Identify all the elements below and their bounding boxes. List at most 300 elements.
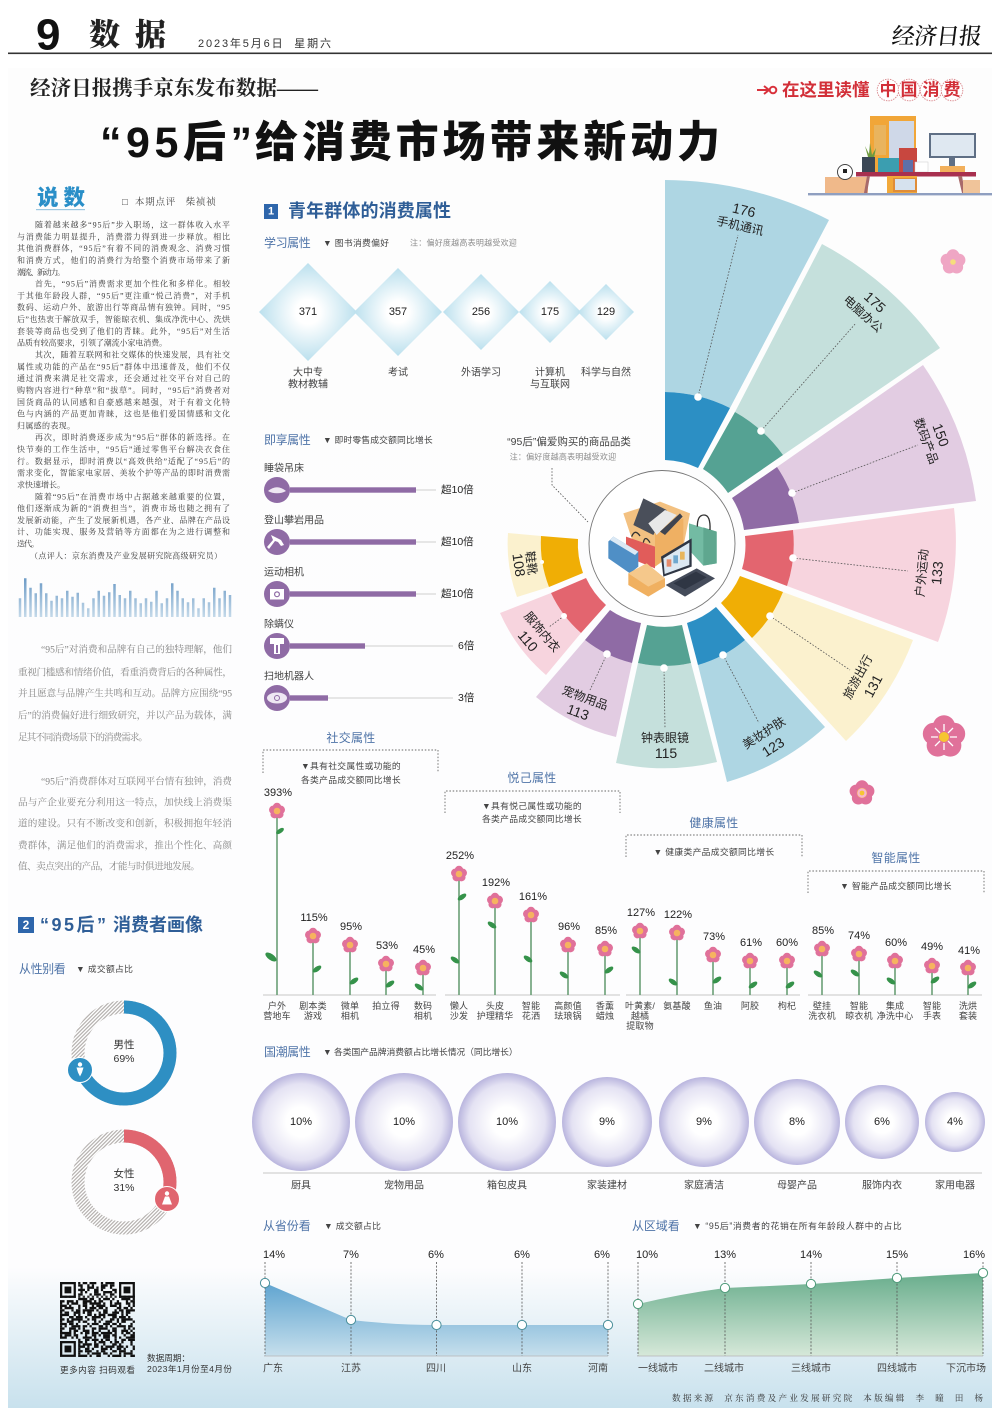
section name: 数据 bbox=[89, 18, 181, 52]
flower: 枸杞: 枸杞 bbox=[778, 1000, 796, 1011]
newspaper logo: 经济日报 bbox=[890, 23, 984, 49]
flower: 叶黄素: 127% bbox=[627, 907, 655, 919]
row: sleeping bag bbox=[264, 462, 474, 503]
flower: 阿胶 bbox=[740, 937, 762, 1011]
bubble chart: guochao: 9% bbox=[599, 1116, 615, 1128]
flower chart: health bbox=[625, 815, 802, 1031]
radial chart heading: 注：偏好度越高表明越受欢迎 bbox=[510, 452, 616, 462]
QR code bbox=[60, 1283, 135, 1356]
flower: 洗烘套装: 套装 bbox=[959, 1010, 977, 1021]
diamond chart: book preference bbox=[259, 263, 634, 390]
flower: 香薰蜡烛: 85% bbox=[595, 925, 617, 937]
commentary text: 快节奏的工作生活中，“95后”通过零售平台解决衣食住 bbox=[17, 444, 230, 455]
analysis text: 品与产企业要充分利用这一特点，加快线上消费渠 bbox=[18, 796, 232, 808]
flower: 智能手表: 49% bbox=[921, 941, 943, 953]
heading: section 2: “95后” bbox=[40, 915, 106, 935]
chart heading: province: ▼ 成交额占比 bbox=[324, 1220, 381, 1231]
data period note: 2023年1月份至4月份 bbox=[147, 1363, 232, 1374]
icon: arrow bbox=[757, 86, 776, 94]
flower chart: smart bbox=[808, 850, 984, 1021]
analysis text bbox=[18, 644, 232, 872]
bubble chart: guochao: 4% bbox=[947, 1116, 963, 1128]
flower: 叶黄素: 叶黄素/ bbox=[625, 1000, 655, 1011]
commentary text: 首先，“95后”消费需求更加个性化和多样化。相较 bbox=[35, 279, 231, 290]
flower: 壁挂洗衣机: 壁挂 bbox=[813, 1000, 831, 1011]
flower: 氨基酸 bbox=[663, 909, 692, 1011]
area chart: region: 10% bbox=[636, 1249, 658, 1261]
commentary text: 色与内涵的产品更加青睐，这也是他们爱国情感和文化 bbox=[17, 409, 230, 420]
chart heading: guochao: ▼ 各类国产品牌消费额占比增长情况（同比增长） bbox=[323, 1046, 518, 1057]
commentary text: 计、功能实现、服务及营销等方面都在为之进行调整和 bbox=[17, 527, 230, 537]
chart heading: province: 从省份看 bbox=[263, 1219, 311, 1233]
analysis text: 后”的消费偏好进行细致研究，并以产品为载体，满 bbox=[18, 710, 232, 722]
commentary text: 于其他年龄段人群，“95后”更注重“悦己消费”，对手机 bbox=[17, 290, 230, 301]
flower: 数码相机: 相机 bbox=[414, 1010, 432, 1021]
sector: digital: 数码产品 bbox=[911, 416, 942, 466]
flower: 枸杞: 60% bbox=[776, 937, 798, 949]
bubble chart: guochao: 6% bbox=[874, 1116, 890, 1128]
flower: 剧本类游戏: 游戏 bbox=[304, 1010, 322, 1021]
commentary text: 他们逐渐成为新的“消费担当”，消费市场也随之拥有了 bbox=[17, 503, 230, 514]
flower: 壁挂洗衣机: 洗衣机 bbox=[808, 1010, 836, 1021]
diamond chart: book preference: 357 bbox=[389, 306, 407, 318]
analysis text: 费群体，满足他们的消费需求，推出个性化、高颜 bbox=[18, 840, 232, 852]
commentary text: 行。数据显示，即时消费以“高效供给”适配了“95后”的 bbox=[17, 456, 230, 467]
chart heading: instant retail: ▼ 即时零售成交额同比增长 bbox=[323, 434, 433, 445]
heading: section 2: 消费者画像 bbox=[113, 915, 203, 935]
flower: 智能晾衣机: 晾衣机 bbox=[845, 1010, 873, 1021]
flower: 数码相机: 45% bbox=[413, 944, 435, 956]
sector: travel: 131 bbox=[860, 672, 886, 700]
heading: gender bbox=[19, 962, 133, 976]
area chart: province: 6% bbox=[514, 1249, 530, 1261]
data period note: 数据周期： bbox=[147, 1352, 190, 1363]
diamond chart: book preference: 371 bbox=[299, 306, 317, 318]
flower: 微单相机: 相机 bbox=[341, 1010, 359, 1021]
flower: 拍立得 bbox=[372, 940, 400, 1011]
commentary text: 需求变化，智能家电家居、美妆个护等产品的即时消费需 bbox=[17, 468, 230, 479]
chart heading: region bbox=[632, 1219, 902, 1233]
commentary text: 数码、运动户外、旅游出行等商品情有独钟。同时，“95 bbox=[17, 302, 230, 313]
series tag: 中 bbox=[880, 80, 896, 100]
series tag: 费 bbox=[944, 80, 960, 100]
diamond chart: book preference: 教材教辅 bbox=[288, 378, 328, 390]
flower: 集成净洗中心: 60% bbox=[885, 937, 907, 949]
subtitle: ▼ 健康类产品成交额同比增长 bbox=[654, 846, 774, 857]
chart heading: learning bbox=[264, 235, 517, 250]
commentary text: 国货商品的认同感和自豪感越来越强，对于有着文化特 bbox=[17, 397, 230, 408]
commentary text: 品质有较高要求，引领了潮流小家电消费。 bbox=[17, 338, 167, 349]
diamond chart: book preference: 129 bbox=[597, 306, 615, 318]
commentary text: 套装等商品也受到了他们的青睐。此外，“95后”对生活 bbox=[17, 326, 230, 337]
heading: 智能属性 bbox=[871, 850, 921, 865]
analysis text: 道的建设。只有不断改变和创新，积极拥抱年轻消 bbox=[18, 818, 232, 830]
commentary text: 再次，即时消费逐步成为“95后”群体的新选择。在 bbox=[35, 432, 230, 443]
heading: section 2: 2 bbox=[23, 918, 30, 932]
commentary text: 和消费方式，他们的消费行为给整个消费市场带来了新 bbox=[17, 255, 230, 266]
flower: 懒人沙发: 沙发 bbox=[450, 1010, 468, 1021]
sector: travel: 旅游出行 bbox=[841, 653, 875, 701]
dotted bracket bbox=[263, 750, 438, 773]
dotted bracket bbox=[626, 835, 802, 857]
bubble chart: guochao: 家用电器 bbox=[935, 1178, 975, 1192]
commentary text: 随着“95后”在消费市场中占据越来越重要的位置， bbox=[35, 491, 230, 502]
sector: digital: 150 bbox=[929, 421, 953, 449]
subtitle: 各类产品成交额同比增长 bbox=[301, 774, 401, 785]
leader line from heading bbox=[552, 468, 588, 522]
QR caption: 更多内容 扫码观看 bbox=[60, 1364, 135, 1375]
flower: 智能花洒 bbox=[519, 891, 547, 1021]
flower: 集成净洗中心: 净洗中心 bbox=[877, 1010, 913, 1021]
flower: 头皮护理精华: 头皮 bbox=[486, 1000, 504, 1011]
donut chart: female 31%: 31% bbox=[113, 1182, 135, 1194]
bubble chart: guochao: 厨具 bbox=[291, 1180, 311, 1192]
commentary text: 与消费能力明显提升，消费潜力得到进一步释放。相比 bbox=[17, 231, 230, 242]
heading: gender: 从性别看 bbox=[19, 962, 66, 976]
bubble chart: guochao: 9% bbox=[696, 1116, 712, 1128]
dotted bracket bbox=[445, 791, 620, 813]
radial chart: preferred categories bbox=[500, 180, 976, 782]
subtitle bbox=[301, 760, 401, 785]
sector: shoes: 鞋靴 bbox=[522, 550, 541, 576]
flower: 氨基酸: 122% bbox=[664, 909, 692, 921]
flower: 叶黄素: 提取物 bbox=[626, 1020, 654, 1031]
area chart: province: 7% bbox=[343, 1249, 359, 1261]
flower: 头皮护理精华: 护理精华 bbox=[477, 1010, 513, 1021]
sector: watches and glasses: 115 bbox=[655, 745, 677, 761]
heading: section 1: 1 bbox=[268, 206, 274, 218]
bubble chart: guochao: 10% bbox=[393, 1116, 415, 1128]
sector: computers: 电脑办公 bbox=[840, 292, 886, 335]
series tag bbox=[757, 79, 963, 101]
commentary text bbox=[17, 220, 231, 560]
area chart: region: 二线城市 bbox=[704, 1362, 744, 1374]
flower: 数码相机 bbox=[413, 944, 435, 1021]
row: mite remover: 6倍 bbox=[458, 639, 475, 652]
commentary text: 购物内容进行“种草”和“拔草”。同时，“95后”消费者对 bbox=[17, 385, 230, 396]
area chart: province: 6% bbox=[428, 1249, 444, 1261]
commentary text: 随着越来越多“95后”步入职场，这一群体收入水平 bbox=[35, 220, 230, 230]
area chart: region: 16% bbox=[963, 1249, 985, 1261]
commentary text: 迭代。 bbox=[17, 539, 39, 549]
sector: beauty bbox=[687, 607, 825, 782]
bubble chart: guochao bbox=[252, 1073, 985, 1192]
sector: mobile: 176 bbox=[731, 200, 757, 220]
commentary panel: 说数 bbox=[17, 186, 231, 560]
area chart: region: 15% bbox=[886, 1249, 908, 1261]
series tag: 在这里读懂 bbox=[782, 80, 870, 100]
flower: 高颜值珐琅锅: 96% bbox=[558, 921, 580, 933]
row: action camera: 超10倍 bbox=[441, 587, 474, 600]
row: action camera: 运动相机 bbox=[264, 566, 304, 578]
subtitle: ▼具有社交属性或功能的 bbox=[301, 760, 401, 771]
subtitle: ▼具有悦己属性或功能的 bbox=[482, 800, 582, 811]
sector: beauty: 123 bbox=[759, 734, 787, 760]
flower: 阿胶: 61% bbox=[740, 937, 762, 949]
chart heading: guochao bbox=[264, 1044, 518, 1059]
flower: 户外露营地车: 营地车 bbox=[263, 1010, 291, 1021]
chart heading: instant retail: 即享属性 bbox=[264, 432, 311, 447]
commentary text: 其他消费群体，“95后”有着不同的消费观念、消费习惯 bbox=[17, 243, 230, 254]
flower: 洗烘套装: 41% bbox=[958, 945, 980, 957]
flower: 智能晾衣机: 74% bbox=[848, 930, 870, 942]
sector: outdoor: 户外运动 bbox=[912, 548, 931, 598]
row: robot vacuum bbox=[264, 670, 475, 711]
diamond chart: book preference: 计算机 bbox=[535, 366, 565, 378]
flower: 集成净洗中心: 集成 bbox=[886, 1000, 904, 1011]
area chart: province: 河南 bbox=[588, 1362, 608, 1374]
flower: 智能花洒: 智能 bbox=[522, 1000, 540, 1011]
flower: 剧本类游戏: 剧本类 bbox=[299, 1000, 327, 1011]
series tag: 消 bbox=[922, 80, 940, 100]
sector: computers bbox=[703, 244, 940, 493]
flower: 壁挂洗衣机 bbox=[808, 925, 836, 1021]
diamond chart: book preference: 与互联网 bbox=[530, 378, 570, 390]
flower: 鱼油: 鱼油 bbox=[704, 1000, 722, 1011]
sector: outdoor bbox=[742, 508, 956, 642]
subtitle: ▼ 智能产品成交额同比增长 bbox=[840, 880, 952, 891]
date: 2023年5月6日 星期六 bbox=[198, 36, 331, 50]
area chart: region bbox=[633, 1249, 988, 1374]
flower: 香薰蜡烛 bbox=[595, 925, 617, 1021]
masthead bbox=[8, 10, 992, 60]
area chart: province: 江苏 bbox=[341, 1362, 361, 1374]
bubble chart: guochao: 家装建材 bbox=[587, 1178, 627, 1192]
bubble chart: guochao: 10% bbox=[496, 1116, 518, 1128]
sector: mobile: 手机通讯 bbox=[715, 214, 765, 238]
series tag: 国 bbox=[900, 80, 918, 100]
flower: 洗烘套装 bbox=[958, 945, 980, 1021]
sector: watches and glasses bbox=[616, 625, 717, 768]
sector: digital bbox=[732, 365, 976, 530]
flower: 高颜值珐琅锅: 高颜值 bbox=[554, 1000, 582, 1011]
sector: shoes bbox=[508, 533, 583, 597]
flower: 头皮护理精华 bbox=[477, 877, 513, 1021]
donut chart: female 31%: 女性 bbox=[114, 1167, 134, 1180]
bubble chart: guochao: 8% bbox=[789, 1116, 805, 1128]
flower: 智能手表 bbox=[921, 941, 943, 1021]
commentary text: （点评人：京东消费及产业发展研究院高级研究员） bbox=[30, 550, 222, 560]
flower: 鱼油: 73% bbox=[703, 931, 725, 943]
heading: 说数: 说数 bbox=[37, 186, 90, 210]
sector: pets bbox=[536, 610, 641, 737]
commentary text: 发展新动能，产生了发展新机遇，各产业、品牌在产品设 bbox=[17, 515, 230, 526]
flower: 智能晾衣机 bbox=[845, 930, 873, 1021]
row: mite remover: 除螨仪 bbox=[264, 618, 294, 630]
main title: “95后” bbox=[100, 119, 252, 167]
flower chart: self-pleasing bbox=[445, 771, 620, 1021]
area chart: province: 14% bbox=[263, 1249, 285, 1261]
page number: 9 bbox=[36, 10, 60, 60]
analysis text: 并且愿意与品牌产生共鸣和互动。品牌方应围绕“95 bbox=[18, 688, 232, 700]
icon: male bbox=[68, 1058, 92, 1082]
sector: computers: 175 bbox=[861, 288, 889, 316]
commentary text: 后”也热衷于解放双手，智能晾衣机、集成净洗中心、洗烘 bbox=[17, 314, 231, 325]
donut chart: male 69%: 69% bbox=[113, 1053, 135, 1065]
bubble chart: guochao: 箱包皮具 bbox=[487, 1178, 527, 1192]
flower: 数码相机: 数码 bbox=[414, 1000, 432, 1011]
donut chart: male 69%: 男性 bbox=[114, 1038, 134, 1051]
chart heading: guochao: 国潮属性 bbox=[264, 1044, 311, 1059]
diamond chart: book preference: 外语学习 bbox=[461, 366, 501, 378]
heading: 悦己属性 bbox=[507, 771, 557, 785]
area chart: region: 三线城市 bbox=[791, 1362, 831, 1374]
subtitle bbox=[482, 800, 582, 824]
area chart: region: 四线城市 bbox=[877, 1362, 917, 1374]
area chart: province: 广东 bbox=[263, 1362, 283, 1374]
flower: 户外露营地车 bbox=[263, 787, 292, 1021]
commentary text: 属性或功能的产品在“95后”群体中迅速普及，他们不仅 bbox=[17, 361, 230, 372]
flower: 智能花洒: 161% bbox=[519, 891, 547, 903]
flower: 叶黄素: 越橘 bbox=[631, 1010, 649, 1021]
flower: 壁挂洗衣机: 85% bbox=[812, 925, 834, 937]
decorative flower: small light bbox=[941, 249, 965, 273]
flower: 叶黄素 bbox=[625, 907, 655, 1031]
icon: female bbox=[154, 1186, 180, 1212]
diamond chart: book preference: 175 bbox=[541, 306, 559, 318]
flower: 拍立得: 53% bbox=[376, 940, 398, 952]
commentary text: 通过消费来满足社交需求，还会通过社交平台对自己的 bbox=[17, 373, 230, 384]
area chart: province: 6% bbox=[594, 1249, 610, 1261]
flower: 洗烘套装: 洗烘 bbox=[959, 1000, 977, 1011]
kicker line: 经济日报携手京东发布数据—— bbox=[30, 76, 318, 100]
chart heading: learning: ▼ 图书消费偏好 bbox=[323, 237, 389, 248]
chart heading: learning: 注：偏好度越高表明越受欢迎 bbox=[410, 238, 517, 248]
flower: 头皮护理精华: 192% bbox=[482, 877, 510, 889]
heading: section 2 bbox=[18, 915, 203, 935]
sector: apparel: 服饰内衣 bbox=[521, 608, 564, 655]
analysis text: 值、卖点突出的产品，才能与时俱进地发展。 bbox=[18, 860, 200, 872]
decorative flower: medium bbox=[850, 780, 874, 804]
flower: 智能花洒: 花洒 bbox=[522, 1010, 540, 1021]
flower: 高颜值珐琅锅 bbox=[554, 921, 582, 1021]
commentary text: 潮流、新动力。 bbox=[17, 267, 65, 277]
flower: 懒人沙发: 懒人 bbox=[450, 1000, 468, 1011]
commentary text: 其次，随着互联网和社交媒体的快速发展，具有社交 bbox=[35, 350, 230, 360]
bubble chart: guochao: 服饰内衣 bbox=[862, 1178, 902, 1192]
flower: 阿胶: 阿胶 bbox=[741, 1000, 759, 1011]
chart heading: province bbox=[263, 1219, 381, 1233]
sector: shoes: 108 bbox=[509, 552, 529, 578]
chart heading: learning: 学习属性 bbox=[264, 235, 311, 250]
area chart: region: 13% bbox=[714, 1249, 736, 1261]
flower chart: social bbox=[263, 730, 438, 1021]
heading: gender: ▼ 成交额占比 bbox=[76, 963, 133, 974]
area chart: region: 14% bbox=[800, 1249, 822, 1261]
sector: apparel: 110 bbox=[515, 627, 541, 655]
flower: 鱼油 bbox=[703, 931, 725, 1011]
flower: 剧本类游戏: 115% bbox=[300, 912, 328, 924]
donut chart: female 31% bbox=[78, 1136, 180, 1228]
bar chart: instant retail growth bbox=[264, 462, 475, 711]
sector: outdoor: 133 bbox=[928, 560, 946, 585]
radial chart heading: “95后”偏爱购买的商品品类 bbox=[507, 435, 631, 448]
row: sleeping bag: 超10倍 bbox=[441, 483, 474, 496]
flower: 智能手表: 手表 bbox=[923, 1010, 941, 1021]
commentary text: 归属感的表现。 bbox=[17, 420, 75, 430]
sector: watches and glasses: 钟表眼镜 bbox=[641, 730, 689, 745]
flower: 拍立得: 拍立得 bbox=[372, 1000, 400, 1011]
byline: □ 本期点评 柴祯祯 bbox=[122, 196, 217, 208]
heading: 社交属性 bbox=[326, 730, 376, 745]
donut chart: male 69% bbox=[68, 1007, 170, 1099]
sector: pets: 宠物用品 bbox=[560, 682, 610, 713]
subtitle: 各类产品成交额同比增长 bbox=[482, 813, 582, 824]
row: robot vacuum: 扫地机器人 bbox=[264, 670, 314, 682]
flower: 户外露营地车: 393% bbox=[264, 787, 292, 799]
flower: 微单相机 bbox=[340, 921, 362, 1021]
row: climbing gear: 登山攀岩用品 bbox=[264, 514, 324, 526]
flower: 户外露营地车: 户外 bbox=[268, 1000, 286, 1011]
flower: 集成净洗中心 bbox=[877, 937, 913, 1021]
analysis text: 重视门槛感和情绪价值，看重消费背后的各种属性， bbox=[18, 666, 232, 678]
flower: 微单相机: 微单 bbox=[341, 1000, 359, 1011]
flower: 微单相机: 95% bbox=[340, 921, 362, 933]
flower: 智能手表: 智能 bbox=[923, 1000, 941, 1011]
chart heading: region: 从区域看 bbox=[632, 1219, 680, 1233]
heading: section 1: 青年群体的消费属性 bbox=[288, 200, 451, 221]
footer credits: 数据来源 京东消费及产业发展研究院 本版编辑 李 曈 田 杨 bbox=[672, 1392, 983, 1403]
sector: travel bbox=[721, 576, 913, 741]
row: robot vacuum: 3倍 bbox=[458, 691, 475, 704]
flower: 香薰蜡烛: 香薰 bbox=[596, 1000, 614, 1011]
sector: apparel bbox=[500, 578, 606, 675]
area chart: province: 山东 bbox=[512, 1362, 532, 1374]
diamond chart: book preference: 256 bbox=[472, 306, 490, 318]
chart heading: region: ▼ “95后”消费者的花销在所有年龄段人群中的占比 bbox=[693, 1220, 902, 1231]
bubble chart: guochao: 母婴产品 bbox=[777, 1178, 817, 1192]
flower: 香薰蜡烛: 蜡烛 bbox=[596, 1010, 614, 1021]
sector: mobile bbox=[665, 180, 829, 468]
heading: 健康属性 bbox=[689, 815, 739, 830]
analysis text: “95后”消费群体对互联网平台情有独钟，消费 bbox=[41, 776, 232, 788]
row: climbing gear bbox=[264, 514, 474, 555]
center circle illustration: shopping bbox=[589, 470, 735, 616]
flower: 氨基酸: 氨基酸 bbox=[663, 1000, 691, 1011]
illustration: home desk bbox=[808, 116, 992, 195]
row: climbing gear: 超10倍 bbox=[441, 535, 474, 548]
area chart: region: 下沉市场 bbox=[946, 1362, 986, 1374]
data period note bbox=[147, 1352, 232, 1374]
decorative bar strip bbox=[20, 578, 230, 617]
flower: 智能晾衣机: 智能 bbox=[850, 1000, 868, 1011]
flower: 剧本类游戏 bbox=[299, 912, 328, 1021]
area chart: province bbox=[260, 1249, 613, 1374]
main title: 给消费市场带来新动力 bbox=[255, 119, 720, 167]
chart heading: instant retail bbox=[264, 432, 433, 447]
diamond chart: book preference: 科学与自然 bbox=[581, 366, 631, 378]
row: action camera bbox=[264, 566, 474, 607]
sector: pets: 113 bbox=[565, 701, 591, 723]
flower: 懒人沙发 bbox=[446, 850, 474, 1021]
flower: 懒人沙发: 252% bbox=[446, 850, 474, 862]
sector: beauty: 美妆护肤 bbox=[740, 713, 788, 752]
row: mite remover bbox=[264, 618, 475, 659]
flower: 枸杞 bbox=[776, 937, 798, 1011]
dotted bracket bbox=[808, 871, 984, 893]
diamond chart: book preference: 考试 bbox=[388, 366, 408, 378]
radial chart heading bbox=[507, 435, 631, 462]
row: sleeping bag: 睡袋吊床 bbox=[264, 462, 304, 474]
commentary text: 求快速增长。 bbox=[17, 480, 65, 490]
area chart: province: 四川 bbox=[426, 1364, 446, 1374]
diamond chart: book preference: 大中专 bbox=[293, 366, 323, 378]
analysis text: “95后”对消费和品牌有自己的独特理解，他们 bbox=[41, 644, 232, 656]
bubble chart: guochao: 家庭清洁 bbox=[684, 1178, 724, 1192]
analysis text: 足其不同消费场景下的消费需求。 bbox=[18, 732, 148, 744]
bubble chart: guochao: 10% bbox=[290, 1116, 312, 1128]
flower: 高颜值珐琅锅: 珐琅锅 bbox=[554, 1010, 582, 1021]
